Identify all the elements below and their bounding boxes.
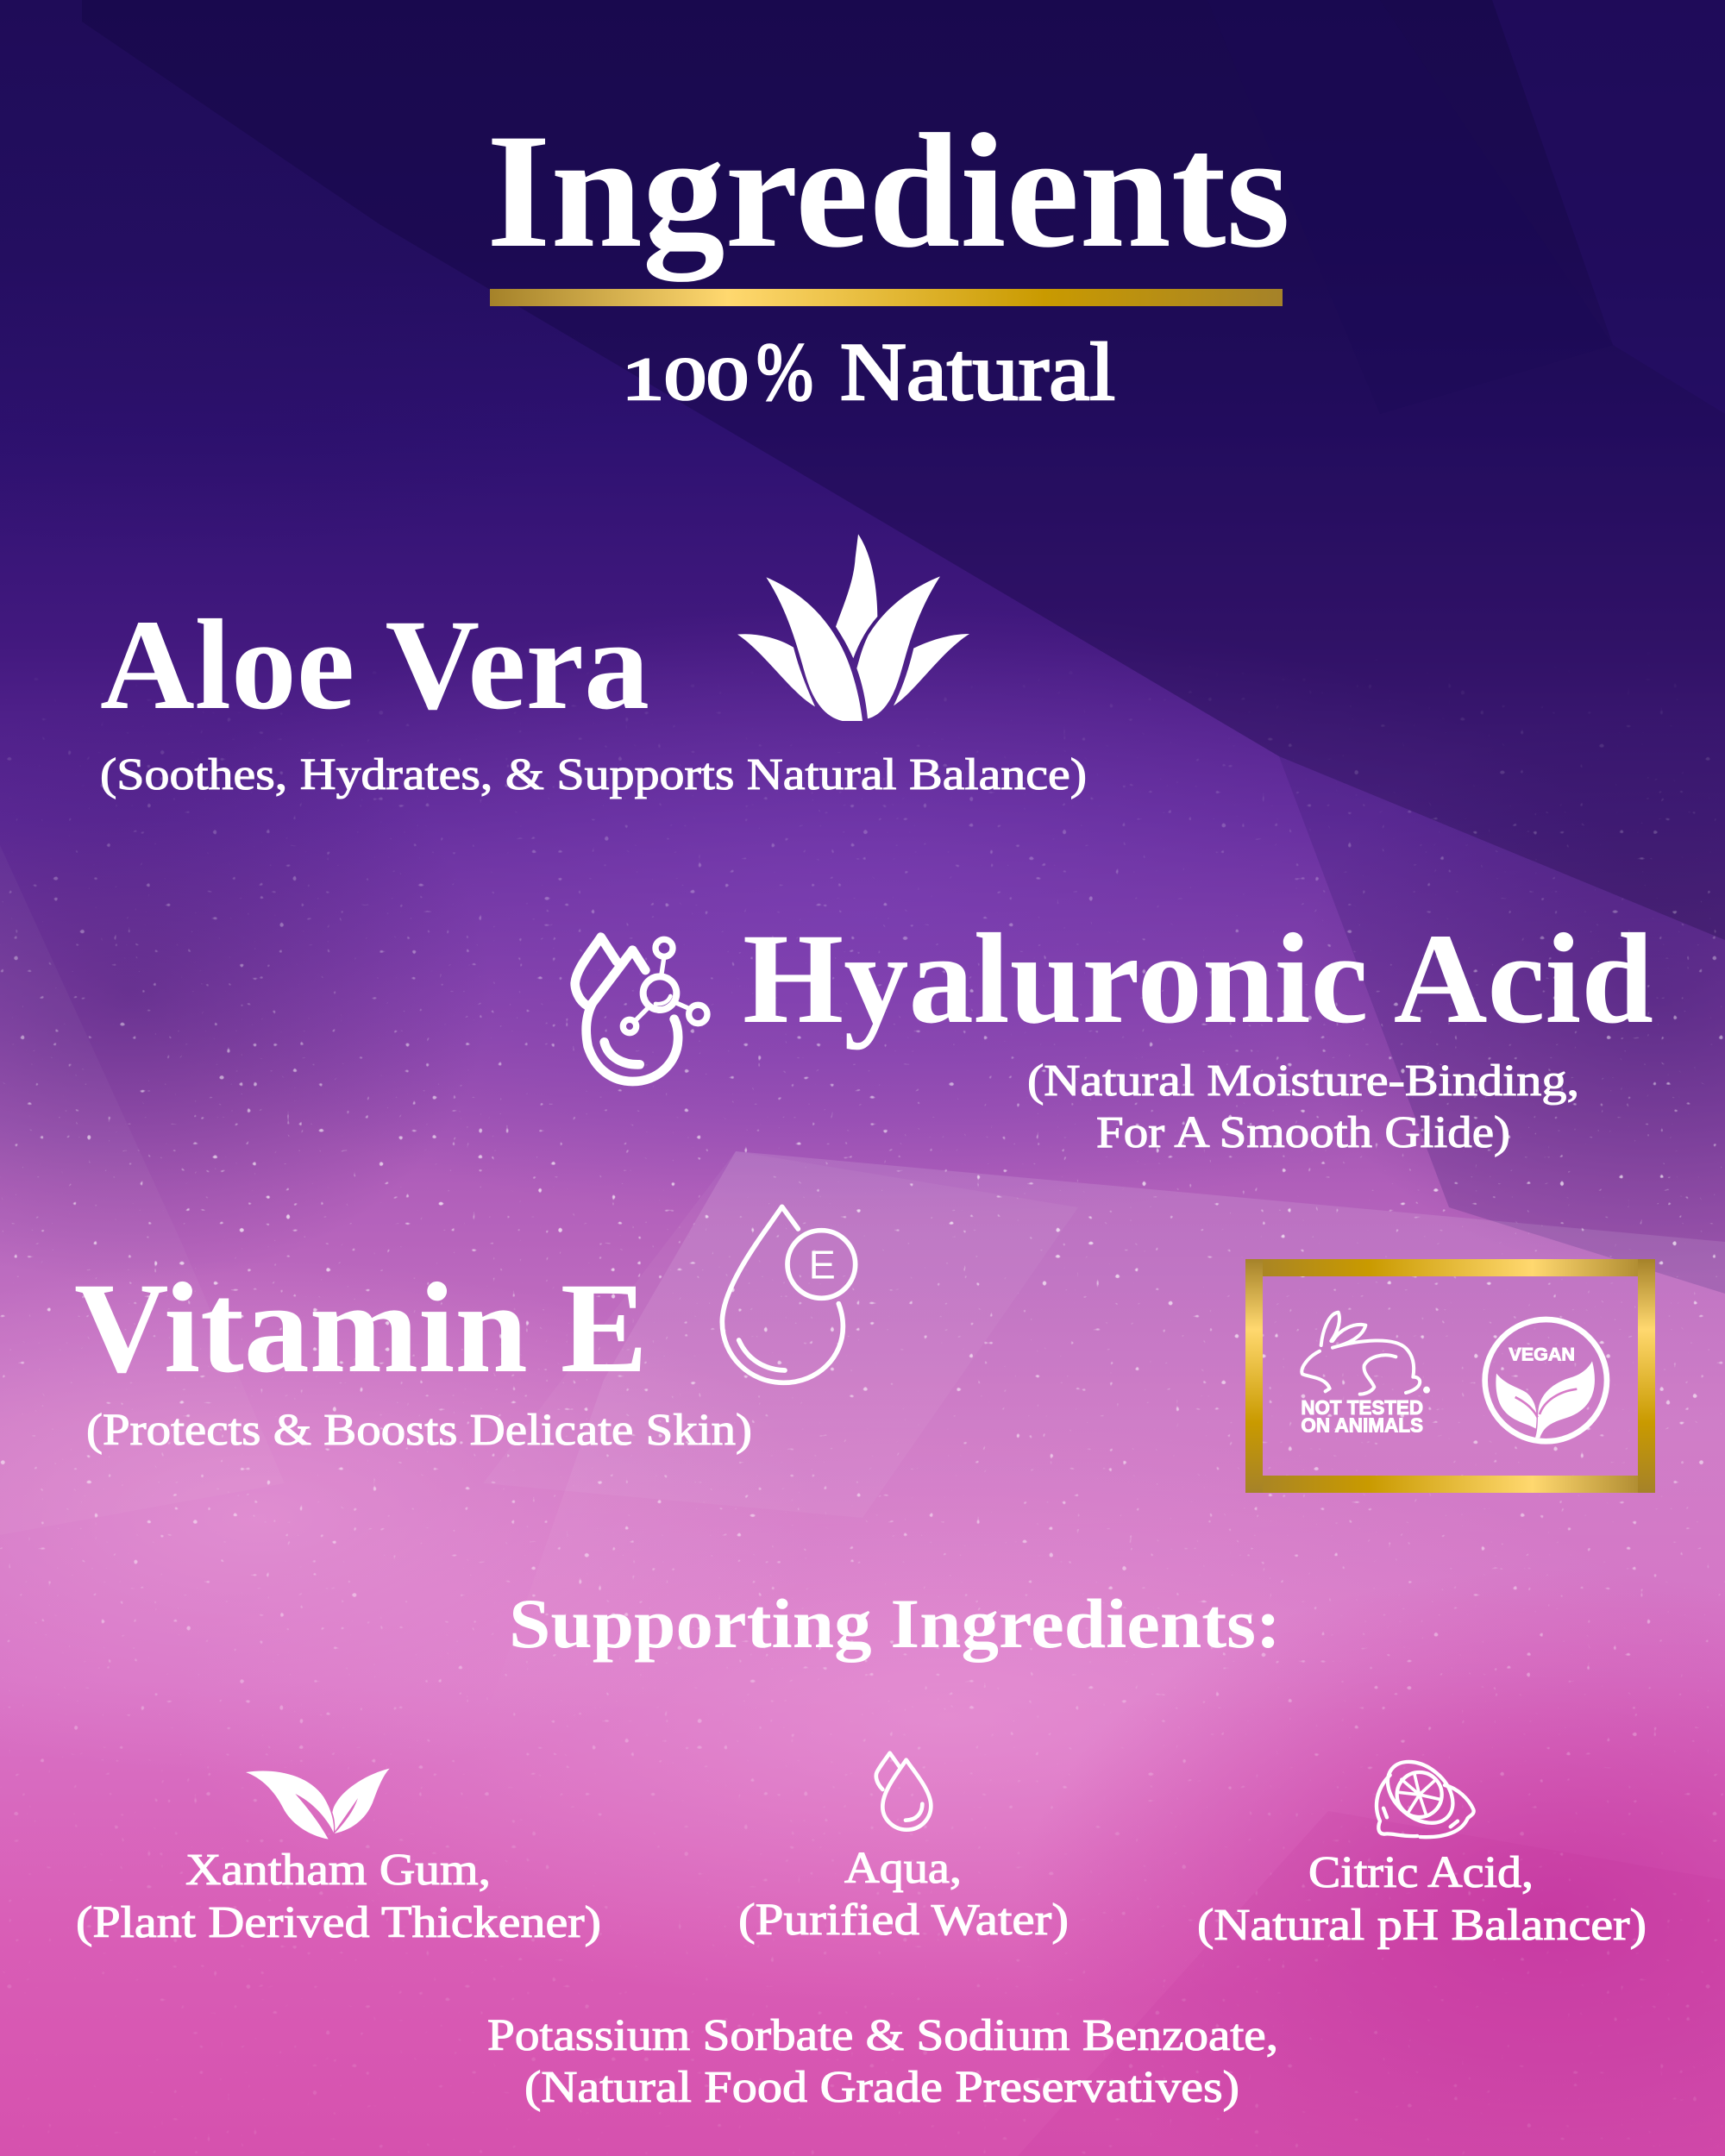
description: Hyaluronic Acid	[1027, 1056, 1579, 1157]
label: Aqua: Aqua,	[844, 1844, 962, 1893]
label: Citric Acid	[1197, 1848, 1647, 1950]
icon: water drop with molecule	[575, 937, 707, 1081]
item: Aqua	[738, 1753, 1069, 1945]
label: Xantham Gum: (Plant Derived Thickener)	[76, 1898, 601, 1947]
gold frame	[1245, 1259, 1655, 1493]
label: Citric Acid: Citric Acid,	[1308, 1848, 1534, 1897]
heading: Hyaluronic Acid: Hyaluronic Acid	[743, 907, 1653, 1050]
gold divider bar	[490, 289, 1283, 306]
icon: rabbit, not tested on animals: ON ANIMALS	[1301, 1414, 1423, 1437]
label: Xantham Gum	[76, 1846, 601, 1947]
item: Citric Acid	[1197, 1749, 1647, 1950]
section: Aloe Vera	[100, 534, 1087, 799]
icon: rabbit, not tested on animals	[1301, 1313, 1430, 1437]
title: Ingredients	[486, 101, 1290, 282]
description: Vitamin E: (Protects & Boosts Delicate Skin)	[86, 1406, 752, 1455]
text block: preservatives: (Natural Food Grade Preservatives)	[524, 2063, 1239, 2112]
heading: Vitamin E: Vitamin E	[74, 1257, 648, 1400]
heading: Aloe Vera: Aloe Vera	[100, 593, 649, 736]
item: Xantham Gum	[76, 1769, 601, 1947]
text block: preservatives	[487, 2011, 1278, 2112]
section: Hyaluronic Acid	[575, 907, 1653, 1157]
label: Aqua	[738, 1844, 1069, 1945]
text block: preservatives: Potassium Sorbate & Sodium Benzoate,	[487, 2011, 1278, 2060]
icon: aloe plant	[737, 534, 969, 721]
icon: water drops	[876, 1753, 931, 1830]
subtitle: 100	[622, 347, 749, 413]
icon: drop with letter E: E	[809, 1243, 836, 1288]
label: Citric Acid: (Natural pH Balancer)	[1197, 1901, 1647, 1950]
description: Hyaluronic Acid: For A Smooth Glide)	[1096, 1108, 1510, 1157]
label: Xantham Gum: Xantham Gum,	[185, 1846, 491, 1895]
section: Vitamin E	[74, 1206, 856, 1455]
icon: vegan leaf seal	[1485, 1319, 1607, 1441]
subtitle: %	[756, 326, 813, 417]
icon: vegan leaf seal: VEGAN	[1509, 1344, 1575, 1365]
badge panel: not tested on animals and vegan	[1245, 1259, 1655, 1493]
icon: lemon	[1376, 1749, 1474, 1837]
description: Aloe Vera: (Soothes, Hydrates, & Supports Natural Balance)	[100, 750, 1087, 799]
subtitle: Natural	[840, 326, 1115, 417]
icon: drop with letter E	[722, 1206, 856, 1382]
description: Hyaluronic Acid: (Natural Moisture-Binding,	[1027, 1056, 1579, 1106]
heading: supporting ingredients: Supporting Ingredients:	[509, 1584, 1281, 1663]
icon: rabbit, not tested on animals: NOT TESTED	[1301, 1396, 1423, 1419]
icon: leaves	[246, 1769, 390, 1839]
label: Aqua: (Purified Water)	[738, 1896, 1069, 1945]
